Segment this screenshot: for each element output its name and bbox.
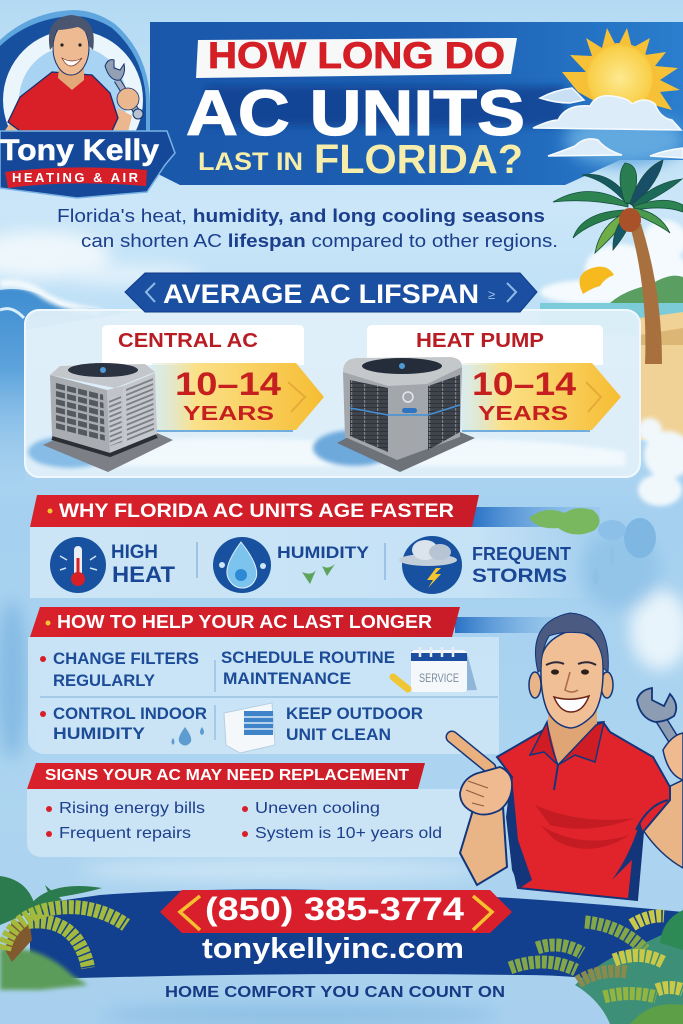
logo name: Tony Kelly — [0, 134, 159, 167]
tip: schedule maintenance — [221, 648, 395, 688]
head — [53, 21, 89, 75]
shirt shadow right — [612, 822, 643, 900]
puddle shadow — [313, 430, 397, 466]
fan — [68, 363, 138, 377]
tip: control humidity: HUMIDITY — [53, 724, 146, 743]
left face — [50, 375, 110, 453]
palm leaves bottom right — [510, 910, 683, 1024]
clouds — [533, 88, 683, 158]
shirt — [497, 722, 670, 900]
label: high heat: HIGH — [111, 542, 158, 563]
arms — [4, 108, 132, 132]
wrench — [105, 60, 143, 119]
central AC lifespan arrow: 10–14 — [175, 366, 281, 402]
finger lines — [466, 781, 488, 806]
section banner: average AC lifespan: AVERAGE AC LIFSPAN — [163, 279, 479, 309]
right arm — [643, 780, 683, 868]
tip: change filters: CHANGE FILTERS — [53, 649, 199, 668]
blue stripe behind mascot — [455, 617, 565, 633]
intro text: can shorten AC lifespan compared to other regions. — [81, 231, 558, 251]
logo person — [4, 15, 143, 132]
panel: signs your AC may need replacement — [27, 763, 470, 857]
signs list: Rising energy bills — [59, 800, 205, 817]
sleeve edge — [636, 800, 668, 830]
logo inner circle — [3, 30, 143, 170]
heat pump card: HEAT PUMP — [416, 330, 544, 352]
icon: storm cloud — [399, 536, 462, 594]
left grill — [350, 380, 388, 452]
tip: change filters: REGULARLY — [53, 671, 156, 690]
section heading: HOW TO HELP YOUR AC LAST LONGER — [57, 611, 432, 632]
teal mass — [575, 925, 683, 1024]
ribbon back tab — [472, 507, 600, 527]
head — [541, 630, 603, 728]
signs list: Uneven cooling — [255, 800, 380, 817]
lower panel highlight — [45, 438, 625, 466]
label: humidity: HUMIDITY — [277, 543, 370, 562]
wrench — [637, 688, 676, 742]
eyes — [60, 43, 82, 47]
right lighter glow — [565, 114, 683, 166]
section heading: SIGNS YOUR AC MAY NEED REPLACEMENT — [45, 767, 409, 784]
tree line — [610, 276, 683, 303]
neck — [548, 705, 597, 765]
fronds — [553, 160, 683, 253]
right grill — [428, 375, 460, 450]
intro text: Florida's heat, humidity, and long cooling seasons — [57, 206, 545, 226]
tip: schedule maintenance: SCHEDULE ROUTINE — [221, 648, 395, 667]
puddle shadow — [28, 436, 112, 468]
corner — [107, 386, 125, 453]
collar — [530, 722, 604, 765]
olive fronds — [510, 922, 656, 997]
title line 3 — [198, 136, 523, 182]
base — [43, 433, 173, 472]
clouds on the right — [638, 418, 683, 506]
dark strip — [205, 86, 565, 126]
signs list — [46, 800, 442, 842]
trunk — [630, 224, 662, 364]
heat pump card — [367, 325, 603, 365]
section heading: WHY FLORIDA AC UNITS AGE FASTER — [59, 501, 454, 522]
panel: why Florida AC units age faster — [30, 495, 656, 598]
sun — [562, 28, 680, 113]
title — [186, 35, 525, 182]
pointing finger — [452, 737, 490, 768]
label: high heat — [111, 542, 176, 587]
icon: service calendar — [393, 647, 477, 692]
fan — [362, 358, 442, 374]
central AC lifespan arrow: YEARS — [183, 403, 274, 425]
panel: AC lifespan — [25, 310, 640, 477]
nose — [565, 672, 578, 692]
central AC lifespan arrow — [152, 363, 324, 431]
clouds behind palm — [540, 220, 683, 304]
arm — [460, 807, 507, 885]
section heading — [27, 763, 425, 789]
label: high heat: HEAT — [112, 562, 176, 587]
title line 1: HOW LONG DO — [208, 35, 505, 76]
hair — [535, 613, 608, 672]
title line 3: LAST IN — [198, 148, 303, 176]
logo ribbon: HEATING & AIR — [12, 170, 139, 185]
panel background — [28, 637, 499, 754]
shirt — [8, 72, 118, 131]
website: tonykellyinc.com — [202, 933, 464, 965]
logo badge — [0, 10, 175, 198]
section heading — [30, 495, 479, 527]
panel background — [27, 789, 470, 857]
fist — [460, 767, 512, 815]
signs list: Frequent repairs — [59, 825, 191, 842]
smile — [62, 58, 82, 66]
icon: leaf and droplets — [529, 508, 656, 585]
top — [343, 357, 462, 386]
phone banner — [160, 890, 512, 933]
palm leaves bottom left — [0, 876, 126, 990]
central AC card: CENTRAL AC — [118, 330, 258, 352]
ears — [529, 672, 613, 698]
palm tree — [553, 160, 683, 364]
label: humidity — [277, 543, 370, 584]
icon: water drop — [213, 537, 271, 593]
label: frequent storms: STORMS — [472, 566, 567, 587]
title line 3: FLORIDA? — [314, 136, 523, 182]
shirt folds — [535, 805, 635, 849]
section banner: average AC lifespan: ≥ — [488, 287, 495, 302]
yellow leaves — [614, 916, 683, 990]
section banner: average AC lifespan — [125, 273, 537, 312]
band fill — [150, 22, 683, 185]
tip: keep outdoor unit clean: UNIT CLEAN — [286, 725, 391, 744]
lower teal leaves — [630, 1004, 683, 1024]
top — [50, 364, 155, 388]
intro text — [57, 206, 558, 251]
yellow fronds — [4, 907, 126, 968]
tip: schedule maintenance: MAINTENANCE — [223, 669, 351, 688]
footer band — [30, 889, 683, 1000]
title band — [150, 22, 683, 185]
heat pump lifespan arrow — [462, 363, 621, 431]
tip: keep outdoor unit clean: KEEP OUTDOOR — [286, 704, 423, 723]
base — [337, 432, 475, 472]
sand — [640, 312, 683, 440]
label: frequent storms — [472, 544, 571, 587]
icon: heat pump unit — [313, 357, 475, 472]
icon: service calendar: SERVICE — [419, 671, 459, 685]
coconuts — [619, 208, 641, 232]
icon: central AC unit — [28, 363, 173, 472]
placket — [554, 765, 558, 790]
blue trim lines — [350, 405, 460, 415]
hand — [117, 88, 139, 110]
brows — [546, 662, 596, 665]
tip: control humidity: CONTROL INDOOR — [53, 704, 207, 723]
eyes — [551, 669, 589, 675]
beach scene — [540, 220, 683, 506]
coconuts and trunk — [5, 920, 32, 962]
dark leaf — [660, 910, 683, 950]
shirt shadow left — [507, 777, 532, 888]
tagline: HOME COMFORT YOU CAN COUNT ON — [165, 984, 505, 1001]
signs list: System is 10+ years old — [255, 825, 442, 842]
bush — [0, 948, 88, 990]
heat pump lifespan arrow: 10–14 — [472, 366, 576, 402]
icon: drops — [172, 727, 204, 746]
icon: thermometer — [50, 537, 106, 593]
dark fronds — [0, 876, 102, 925]
wave on the left — [0, 283, 130, 490]
panel background — [25, 310, 640, 477]
sea — [540, 303, 683, 335]
section heading — [30, 607, 460, 637]
brand plate — [402, 408, 417, 413]
neck — [58, 66, 84, 90]
smile — [554, 696, 589, 712]
hand with wrench — [663, 733, 683, 780]
phone banner: (850) 385-3774 — [205, 891, 464, 927]
logo ribbon — [5, 167, 147, 188]
title line 2: AC UNITS — [186, 77, 525, 149]
central AC card — [102, 325, 304, 365]
logo name plate — [0, 131, 175, 198]
small sun — [580, 267, 614, 294]
tip: keep outdoor unit clean — [286, 704, 423, 744]
tip: change filters — [40, 649, 199, 690]
heat pump lifespan arrow: YEARS — [478, 403, 568, 425]
mascot — [452, 613, 683, 900]
base strip — [52, 436, 157, 455]
panel: how to help your AC last longer — [28, 607, 565, 754]
label: frequent storms: FREQUENT — [472, 544, 571, 564]
body — [343, 367, 462, 460]
tip: control humidity — [40, 704, 207, 743]
right face — [123, 373, 157, 450]
hair — [49, 15, 94, 50]
panel background — [30, 527, 590, 598]
icon: dehumidifier — [224, 703, 275, 753]
logo outer ring — [0, 10, 150, 135]
